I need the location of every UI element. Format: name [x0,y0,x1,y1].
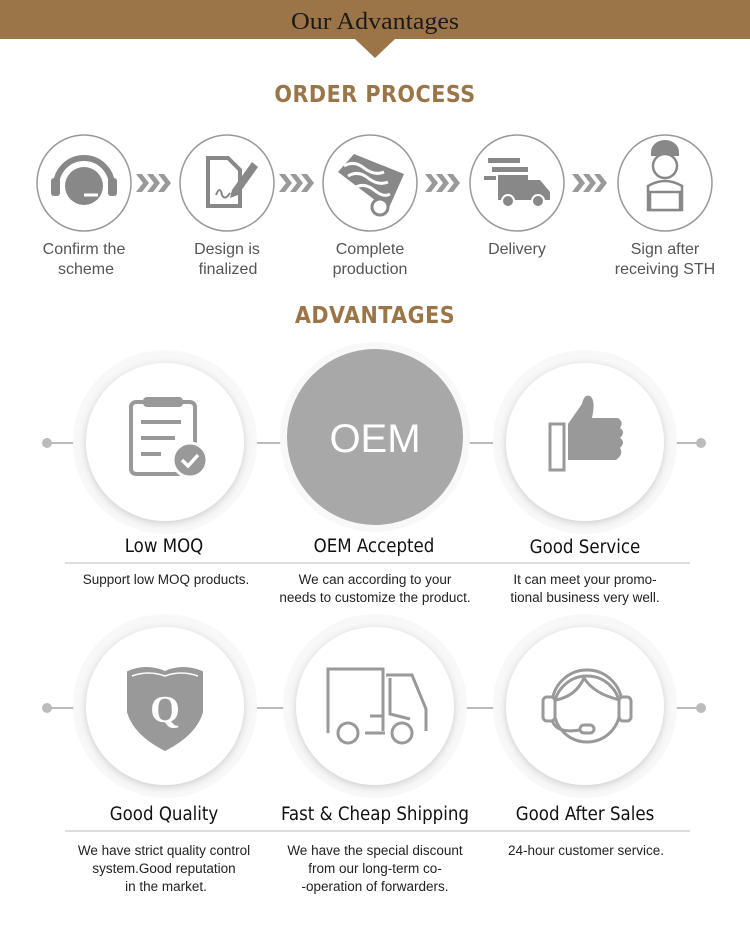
process step 3: complete production: production [333,261,407,278]
advantage: OEM accepted: We can according to your [299,572,452,587]
process step 1: confirm the scheme [37,135,131,278]
advantage: good after sales: Good After Sales [516,804,654,825]
process step 2: design finalized: Design is [194,241,260,258]
process step 5: sign after receiving: receiving STH [615,261,715,278]
divider row 1 [65,562,690,564]
advantage: good quality [73,614,257,894]
connector lines row 1 [47,442,700,444]
advantage: good service: Good Service [530,537,640,558]
connector lines row 2 [47,707,700,709]
advantage: fast & cheap shipping: We have the special discount [287,843,463,858]
process step 5: sign after receiving: Sign after [631,241,700,258]
advantage: OEM accepted: OEM [329,417,421,461]
advantage: OEM accepted: needs to customize the product. [279,590,471,605]
process step 4: delivery: Delivery [488,241,546,258]
header banner: Our Advantages [291,9,459,35]
advantage: low MOQ: Low MOQ [125,536,203,557]
advantage: fast & cheap shipping: from our long-term co- [308,861,442,876]
process step 5: sign after receiving [615,135,715,278]
process step 1: confirm the scheme: scheme [58,261,114,278]
arrow [136,174,171,192]
process step 3: complete production: Complete [336,241,404,258]
advantage: low MOQ [73,350,257,587]
advantage: fast & cheap shipping [281,614,469,894]
process step 4: delivery [470,135,564,258]
advantage: fast & cheap shipping: -operation of forwarders. [301,879,449,894]
advantage: good quality: Q [150,689,180,731]
process step 2: design finalized [180,135,274,278]
process step 1: confirm the scheme: Confirm the [43,241,125,258]
advantage: good quality: in the market. [125,879,207,894]
advantage: OEM accepted [279,342,471,605]
process step 3: complete production [323,135,417,278]
advantage: good quality: Good Quality [110,804,218,825]
arrow [425,174,460,192]
advantage: good after sales [493,614,677,858]
process step 2: design finalized: finalized [199,261,257,278]
advantage: good quality: system.Good reputation [92,861,236,876]
advantage: good service: It can meet your promo- [513,572,657,587]
heading: advantages: ADVANTAGES [295,303,455,329]
advantage: OEM accepted: OEM Accepted [314,536,434,557]
arrow [279,174,314,192]
advantage: good quality: We have strict quality control [78,843,250,858]
heading: order process: ORDER PROCESS [274,82,476,108]
header banner [0,0,750,58]
arrow [572,174,607,192]
advantage: good service: tional business very well. [510,590,660,605]
advantage: good service [493,350,677,605]
advantage: fast & cheap shipping: Fast & Cheap Shipping [281,804,469,825]
advantage: good after sales: 24-hour customer service. [508,843,664,858]
divider row 2 [65,830,690,832]
advantage: low MOQ: Support low MOQ products. [83,572,249,587]
